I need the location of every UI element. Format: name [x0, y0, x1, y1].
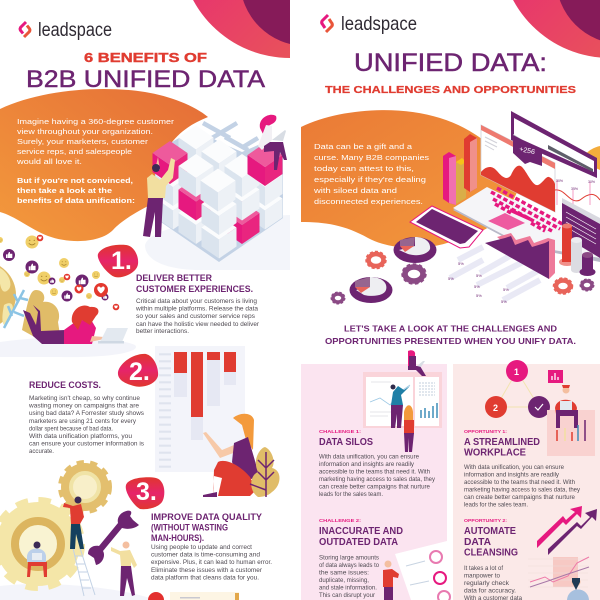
number badge 2: 2. [129, 358, 150, 386]
line chart: 30% [556, 179, 563, 183]
section 3 text: Using people to update and correct [151, 544, 252, 551]
intro text: benefits of data unification: [17, 196, 135, 205]
opportunity 2 text: AUTOMATE [464, 525, 516, 537]
intro text: today can attest to this, [314, 164, 414, 173]
intro text: view throughout your organization. [17, 127, 153, 136]
challenge 1 text: accessible to the teams that need it. With [319, 468, 430, 476]
cube shadow [145, 215, 290, 270]
phone [410, 206, 483, 248]
social reactions and globe [0, 235, 119, 329]
next number badge peek [148, 592, 164, 600]
title: UNIFIED DATA: [354, 49, 547, 77]
challenge 1 text [319, 429, 436, 498]
document peek [170, 592, 239, 600]
intro text [16, 117, 175, 205]
person sitting in gear [27, 542, 47, 577]
number badge 1: 1. [111, 247, 132, 275]
challenge 2 text [319, 518, 403, 600]
ladder [73, 548, 95, 596]
network of circles [485, 360, 550, 418]
line chart [555, 179, 600, 205]
transition heading [325, 324, 576, 346]
challenge 1 text: DATA SILOS [319, 436, 373, 448]
network of circles: 2 [493, 403, 498, 413]
opportunity 1 text: can create better campaigns that nurture [464, 494, 575, 501]
opportunity 1 text: information and insights are readily [464, 472, 560, 478]
line chart: 35% [571, 187, 578, 191]
section 3 text: Eliminate these issues with a customer [151, 567, 262, 574]
intro text: would all love it. [16, 157, 82, 166]
intro text: Surely, your marketers, customer [17, 137, 149, 146]
section 1 text: can have the holistic view needed to deliver [136, 321, 259, 328]
number badge 1 [98, 245, 138, 277]
transition heading: LET'S TAKE A LOOK AT THE CHALLENGES AND [344, 324, 557, 334]
chart window [481, 125, 555, 212]
challenge 2 text: CHALLENGE 2: [319, 518, 362, 523]
bar chart panel [155, 346, 245, 472]
horizontal bars: 5% [474, 284, 480, 289]
bottom ground [0, 584, 155, 600]
challenge 2 text: of data always leads to [319, 562, 379, 569]
woman standing with blonde hair [404, 405, 414, 452]
challenge 1 text: leads for the sales team. [319, 491, 383, 498]
purple area chart [485, 233, 555, 279]
intro text: service reps, and salespeople [17, 147, 132, 156]
man with beard [567, 578, 589, 600]
dashboard illustration [363, 372, 442, 428]
intro text: But if you're not convinced, [17, 176, 133, 185]
title [28, 52, 266, 88]
opportunity 1 text: OPPORTUNITY 1: [464, 429, 508, 434]
man on ladder [63, 496, 84, 549]
logo: leadspace: leadspace [341, 13, 417, 35]
man with report [383, 560, 399, 600]
section 1 text [135, 273, 259, 335]
opportunity 2 text: OPPORTUNITY 2: [464, 518, 508, 523]
gears [332, 252, 594, 304]
section 3 text: data platform that cleans data for you. [151, 574, 259, 582]
section 2 text: using bad data? A Forrester study shows [29, 410, 144, 417]
woman sitting on window [408, 350, 426, 376]
opportunity 1 text: With data unification, you can ensure [464, 464, 564, 471]
plant [4, 290, 60, 340]
opportunity 1 text: accessible to the teams that need it. With [464, 479, 575, 486]
rising arrows [537, 506, 597, 555]
challenge 2 text: INACCURATE AND [319, 525, 403, 537]
opportunity 2 text: It takes a lot of [464, 565, 503, 572]
autumn plant [250, 447, 280, 497]
wrench [88, 511, 139, 565]
challenges panel [301, 364, 447, 600]
orange intro blob [301, 110, 520, 248]
intro text: disconnected experiences. [314, 197, 423, 206]
code panel [562, 198, 600, 258]
title: 6 BENEFITS OF [84, 51, 207, 65]
challenge 2 text: OUTDATED DATA [319, 536, 398, 548]
intro text: Imagine having a 360-degree customer [17, 117, 175, 126]
section 2 text: accurate. [29, 448, 54, 455]
opportunity 2 text [464, 518, 522, 600]
section 3 text: (WITHOUT WASTING [151, 522, 228, 532]
line chart: 30% [588, 180, 595, 184]
opportunity 2 text: data for accuracy. [464, 588, 516, 594]
trend chart [528, 557, 589, 587]
opportunity 1 text: A STREAMLINED [464, 436, 540, 448]
section 2 text: REDUCE COSTS. [29, 380, 101, 390]
section 1 text: DELIVER BETTER [136, 273, 212, 283]
number badge 3: 3. [136, 478, 157, 506]
pie chart 1 [394, 237, 436, 263]
report sheet with donuts [395, 541, 450, 600]
logo: leadspace: leadspace [38, 20, 112, 41]
challenge 2 text: and stale information. [319, 584, 377, 592]
section 3 text: IMPROVE DATA QUALITY [151, 512, 262, 522]
section 2 text [28, 380, 144, 455]
section 3 text [151, 512, 272, 582]
horizontal bars: 5% [501, 299, 507, 304]
challenge 1 text: information and insights are readily [319, 461, 415, 468]
horizontal bars: 5% [476, 273, 482, 278]
ground shadow [0, 337, 136, 357]
left infographic panel [0, 0, 290, 600]
right infographic panel [301, 0, 600, 600]
opportunity 2 text: DATA [464, 536, 491, 548]
number badge 3 [126, 477, 164, 509]
yellow accent [578, 146, 600, 170]
opportunity 2 text: regularly check [464, 580, 510, 587]
challenge 2 text: duplicate, missing, [319, 577, 369, 584]
3D bar trio [443, 134, 477, 205]
section 2 text: wasting money on campaigns that are [28, 402, 140, 410]
transition heading: OPPORTUNITIES PRESENTED WHEN YOU UNIFY DATA. [325, 336, 576, 346]
section 2 text: can ensure your customer information is [29, 440, 144, 448]
challenge 2 text: Storing large amounts [319, 554, 379, 562]
challenge 2 text: the same issues: [319, 570, 369, 576]
intro text [313, 142, 429, 206]
cylinders [559, 224, 596, 276]
corner arc: purple [560, 0, 600, 40]
intro text: especially if they're dealing [314, 175, 426, 184]
value badge +256: +256 [519, 146, 536, 156]
man on block with laptop [547, 370, 595, 456]
section 2 text: With data unification platforms, you [29, 433, 133, 440]
challenge 2 text: This can disrupt your [319, 592, 375, 599]
section 3 text: MAN-HOURS). [151, 533, 204, 543]
woman with laptop [23, 305, 128, 344]
intro text: curse. Many B2B companies [314, 153, 429, 162]
challenge 1 text: can create better campaigns that nurture [319, 484, 430, 490]
section 2 text: dollar spent because of bad data. [29, 426, 113, 432]
section 1 text: Critical data about your customers is living [136, 298, 257, 305]
challenge 1 text: With data unification, you can ensure [319, 454, 419, 460]
back monitor frame [511, 111, 597, 178]
man lifting cube [143, 157, 175, 237]
large gear [0, 502, 80, 586]
woman sitting on cube [258, 115, 287, 170]
horizontal bars: 5% [503, 287, 509, 292]
opportunity 1 text: leads for the sales team. [464, 502, 528, 508]
intro text: with siloed data and [313, 186, 397, 195]
section 3 text: expensive. Plus, it can lead to human error. [151, 559, 272, 566]
opportunity 2 text: manpower to [464, 572, 500, 580]
laptop base and keyboard [453, 187, 600, 262]
woman pointing at chart [203, 414, 260, 497]
pie chart 2 [350, 277, 392, 303]
horizontal bars: 5% [448, 276, 454, 281]
corner arc: pink [513, 0, 600, 58]
challenge 1 text: marketing having access to sales data, they [319, 476, 436, 483]
corner arc: pink [193, 0, 290, 58]
small gear [61, 463, 109, 511]
man holding wrench [111, 542, 137, 596]
number badge 2 [118, 354, 158, 387]
section 2 text: Marketing isn't cheap, so why continue [29, 395, 141, 402]
opportunity 2 text: CLEANSING [464, 546, 518, 558]
title: B2B UNIFIED DATA [26, 66, 265, 93]
title: THE CHALLENGES AND OPPORTUNITIES [325, 84, 576, 96]
network of circles: 1 [514, 367, 519, 377]
opportunity 1 text: marketing having access to sales data, they [464, 486, 581, 494]
section 1 text: CUSTOMER EXPERIENCES. [136, 284, 253, 294]
opportunity 1 text [464, 429, 581, 508]
value badge +256 [513, 134, 542, 166]
horizontal bars: 5% [476, 293, 482, 298]
intro text: then take a look at the [17, 186, 112, 195]
section 2 text: marketers are using 21 cents for every [29, 418, 137, 425]
section 3 text: customer data is time-consuming and [151, 552, 261, 558]
section 1 text: better interactions. [136, 328, 189, 335]
intro text: Data can be a gift and a [314, 142, 413, 151]
corner arc: purple [243, 0, 290, 44]
rubik cube illustration [152, 123, 283, 262]
title [325, 53, 576, 94]
section 1 text: within multiple platforms. Release the data [135, 306, 259, 312]
orange intro blob [0, 89, 208, 241]
horizontal bars: 5% [458, 261, 464, 266]
opportunity 1 text: WORKPLACE [464, 446, 526, 458]
section 1 text: so your sales and customer service reps [136, 313, 255, 320]
challenge 1 text: CHALLENGE 1: [319, 429, 362, 434]
opportunities panel [453, 364, 600, 600]
horizontal bars [448, 247, 543, 304]
